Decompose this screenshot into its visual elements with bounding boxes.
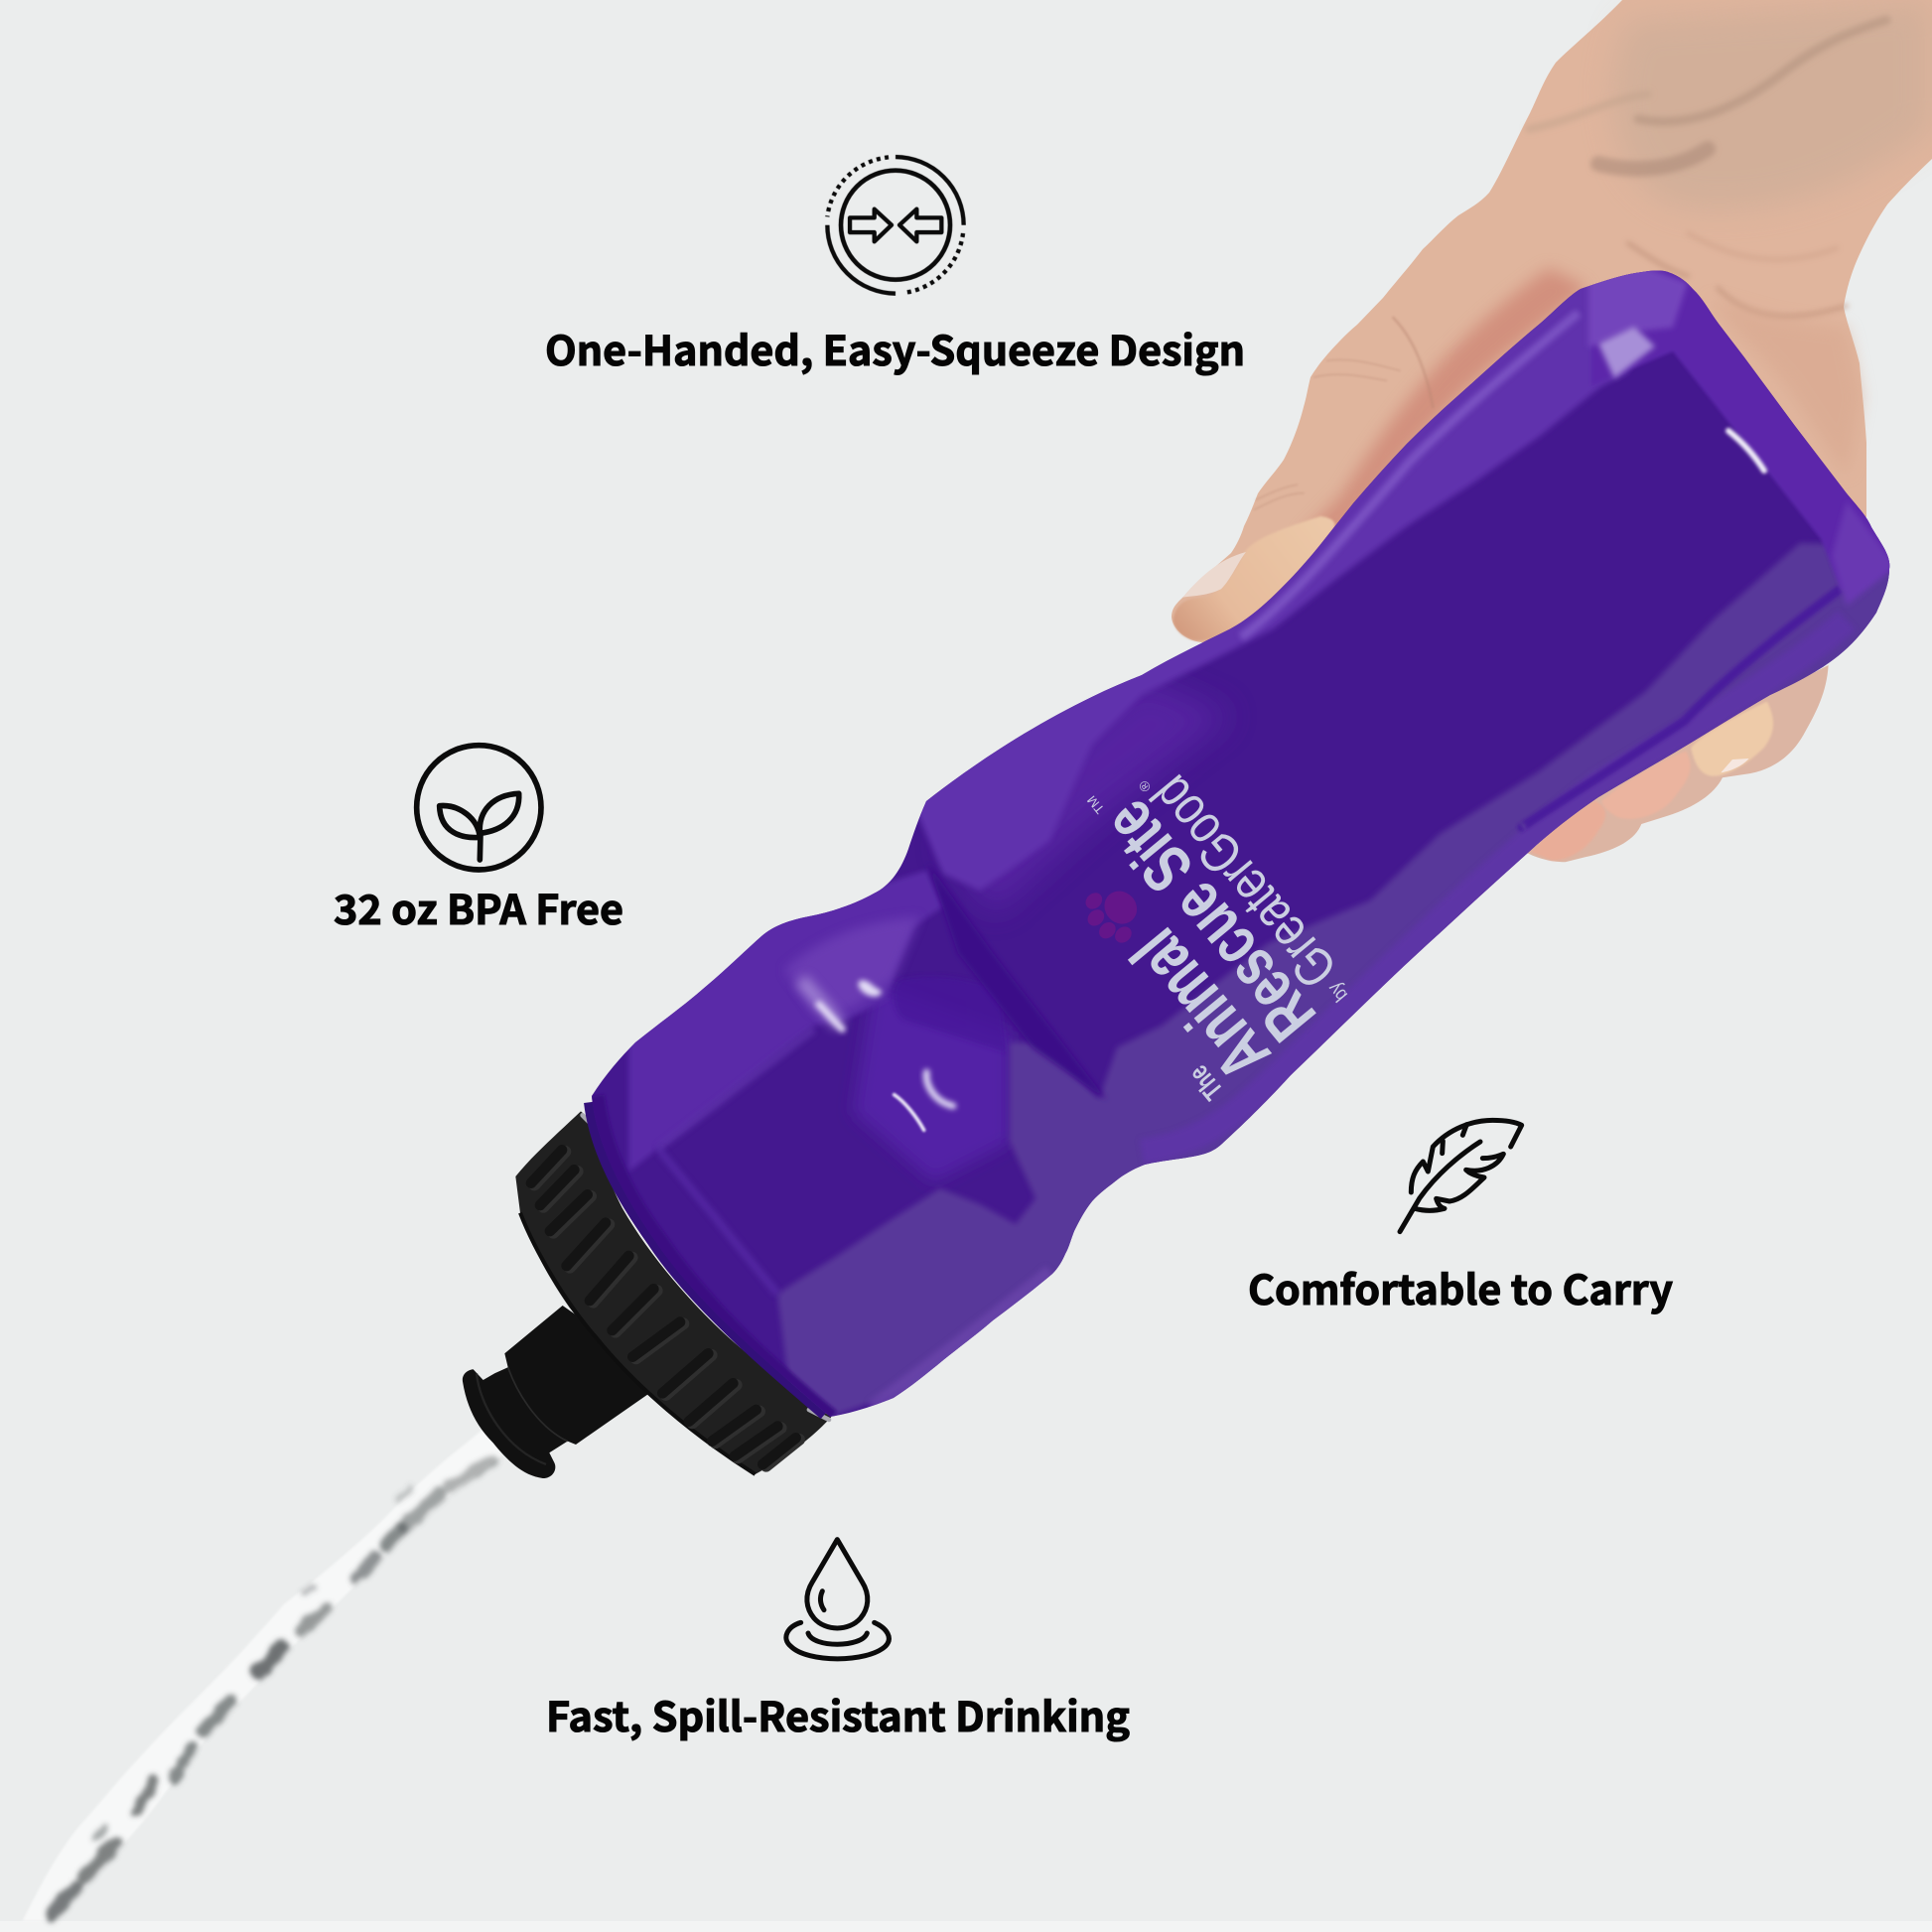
bottle label <box>1075 764 1352 1106</box>
logo text: The: The <box>1182 1059 1229 1106</box>
icon: paw <box>1075 875 1152 952</box>
end band <box>1592 270 1890 576</box>
finger 2 <box>1601 752 1691 819</box>
forearm shading <box>1612 0 1932 210</box>
registered mark: ® <box>1135 777 1154 795</box>
icon: squeeze arrows <box>827 157 964 294</box>
bottom section upper light <box>628 871 1006 1172</box>
neck shadow <box>594 1096 830 1420</box>
lower dark stripe <box>1522 589 1841 827</box>
end band glare <box>1598 327 1655 378</box>
trademark: TM <box>1084 793 1107 817</box>
logo text: GreaterGood: GreaterGood <box>1139 764 1348 1000</box>
bottom panel line <box>658 1030 814 1149</box>
grip ribs <box>531 1150 799 1466</box>
logo text: by: by <box>1323 978 1352 1006</box>
palm warm shading <box>1301 268 1588 566</box>
bottle cap <box>463 1111 831 1478</box>
heading: fast drinking: Fast, Spill-Resistant Drinking <box>546 1684 1130 1743</box>
finger 1 <box>1531 801 1605 861</box>
label section soft glow <box>979 686 1215 902</box>
heading: comfortable: Comfortable to Carry <box>1248 1257 1673 1316</box>
heading: BPA free: 32 oz BPA Free <box>334 877 623 936</box>
upper light strip <box>913 248 1628 891</box>
upper edge glint <box>1241 313 1579 637</box>
waist highlights <box>858 980 882 997</box>
logo text: Animal: Animal <box>1116 914 1285 1095</box>
nozzle <box>463 1306 668 1478</box>
collar ring <box>515 1111 831 1474</box>
logo text: Rescue Site: Rescue Site <box>1089 786 1330 1055</box>
lower band rim tint <box>1142 621 1847 1152</box>
neck seal <box>592 1102 826 1413</box>
waist dark stripe <box>928 864 1107 1100</box>
heading: one-handed design: One-Handed, Easy-Squeeze Design <box>545 318 1245 377</box>
knuckle creases <box>1254 318 1433 509</box>
icon: sprout <box>417 746 541 870</box>
waist dark notch <box>896 981 1004 1049</box>
bottom light strip <box>0 1921 1932 1932</box>
rim highlight <box>583 1115 829 1420</box>
icon: feather <box>1400 1120 1522 1232</box>
icon: water drop <box>786 1540 889 1659</box>
fingers <box>1527 665 1829 862</box>
water stream <box>23 1428 501 1921</box>
waist tone <box>854 983 1010 1181</box>
hand <box>1172 0 1932 695</box>
veins <box>1529 20 1886 169</box>
finger 3 <box>1691 702 1773 776</box>
thumb nail <box>1183 552 1246 598</box>
thumb <box>1173 318 1433 640</box>
lower reflection band <box>777 543 1932 1430</box>
bottle body <box>592 248 1932 1430</box>
nails <box>1721 759 1749 772</box>
wrist creases <box>1628 233 1847 317</box>
